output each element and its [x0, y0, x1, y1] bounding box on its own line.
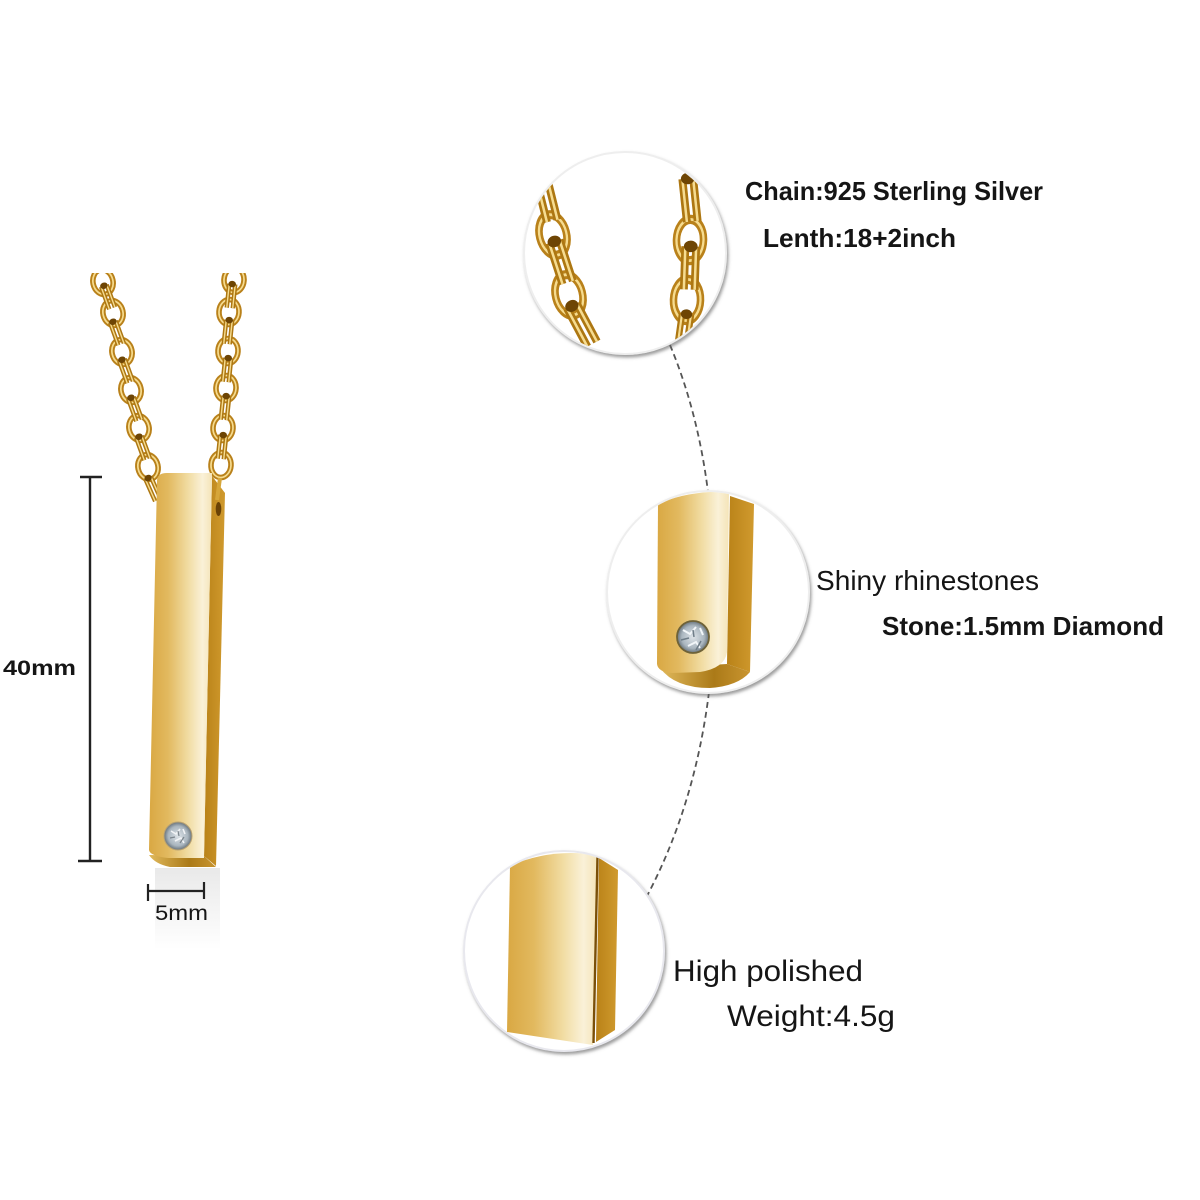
detail circle: chain	[524, 152, 726, 354]
necklace pendant with chain	[90, 267, 245, 950]
chain: left strand	[90, 268, 161, 502]
width dimension: 5mm: 5mm	[155, 902, 208, 925]
connector: stone to polish	[647, 692, 709, 896]
label: chain: Chain:925 Sterling Silver	[745, 176, 1043, 206]
label: chain	[745, 176, 1043, 253]
connector: chain to stone	[670, 345, 708, 492]
pendant stone	[164, 822, 192, 850]
label: stone: Shiny rhinestones	[816, 565, 1039, 596]
detail circle: polish	[464, 851, 664, 1051]
label: polish	[673, 955, 895, 1033]
label: stone	[816, 565, 1164, 641]
pendant bail hole	[216, 502, 221, 516]
label: polish: Weight:4.5g	[727, 1000, 895, 1033]
pendant bottom face	[149, 855, 216, 867]
label: polish: High polished	[673, 955, 863, 988]
width dimension: 5mm	[148, 882, 208, 925]
height dimension: 40mm: 40mm	[3, 657, 76, 680]
pendant side face	[204, 476, 225, 866]
chain: right strand	[210, 267, 245, 478]
detail circle: stone	[607, 491, 809, 693]
pendant front face	[149, 473, 212, 858]
label: stone: Stone:1.5mm Diamond	[882, 611, 1164, 641]
height dimension: 40mm	[3, 477, 102, 861]
pendant bail link	[217, 478, 220, 500]
label: chain: Lenth:18+2inch	[763, 223, 956, 253]
pendant reflection	[155, 868, 220, 950]
